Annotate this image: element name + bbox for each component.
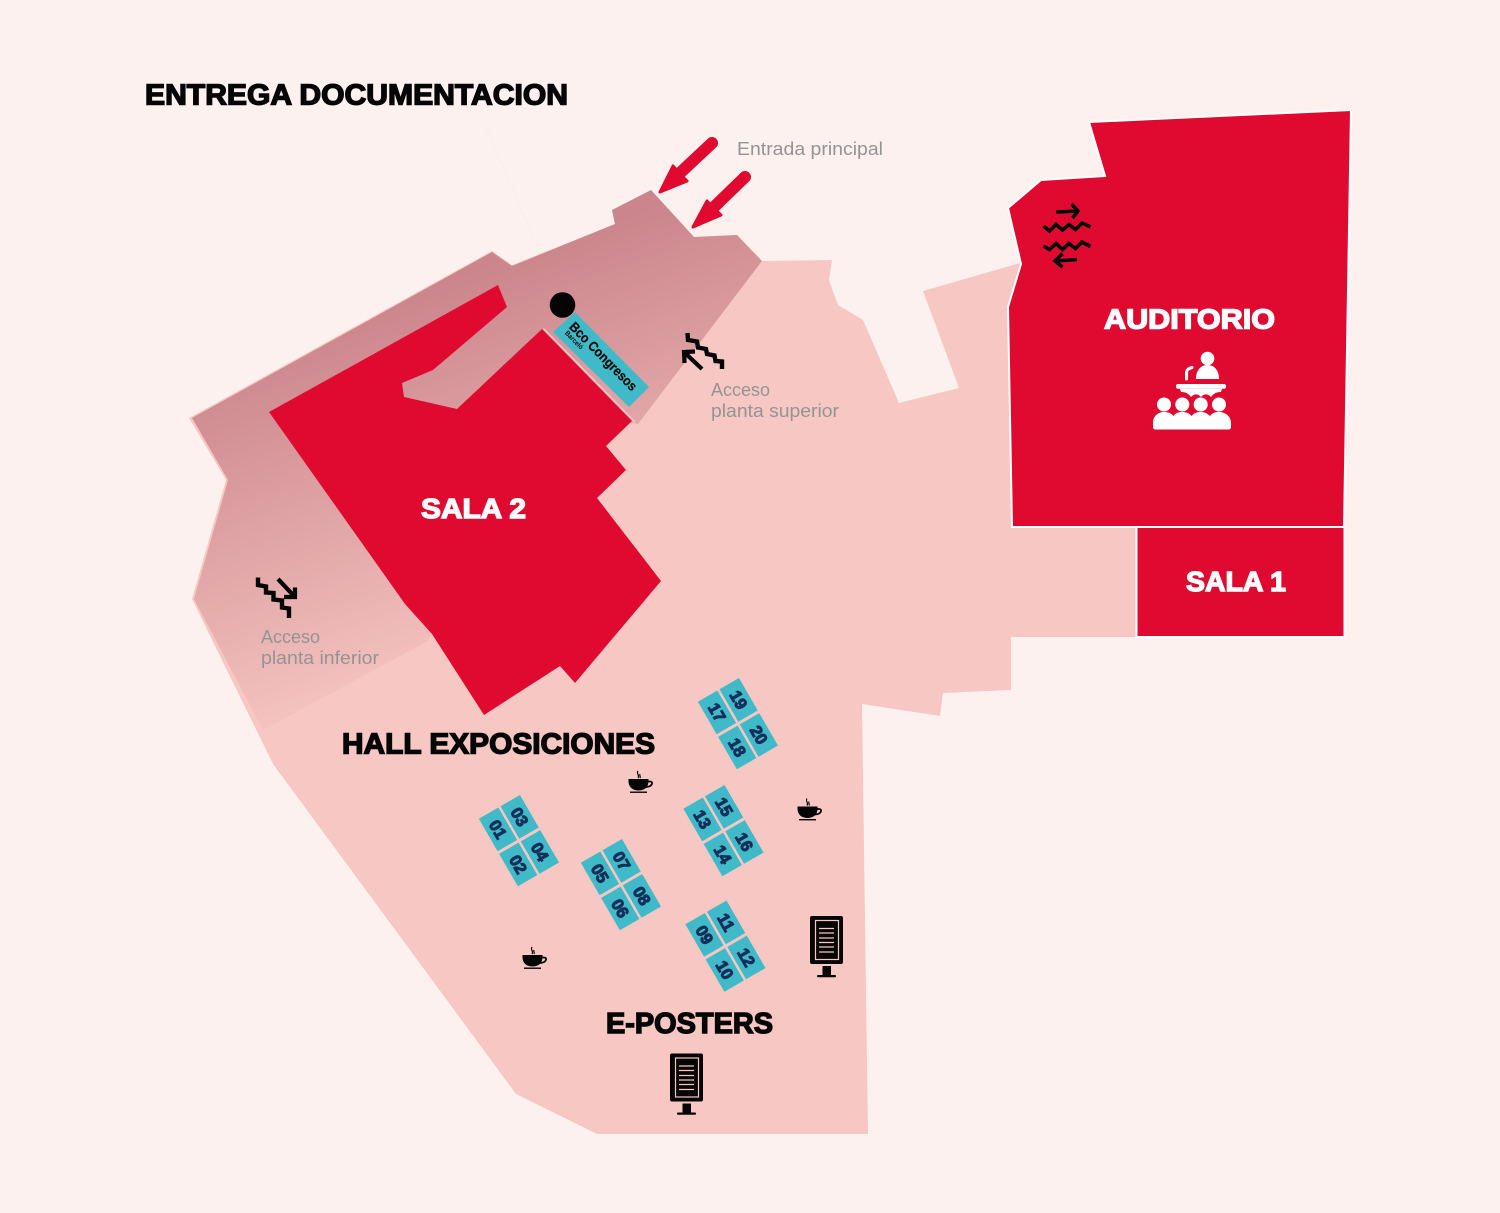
stands 17 to 20: 18 — [724, 735, 749, 760]
stands 13 to 16: 15 — [711, 795, 736, 820]
faint construction line — [485, 125, 541, 255]
stands 13 to 16: 13 — [689, 807, 714, 832]
icon: entrance arrow one — [660, 143, 712, 192]
stands 05 to 08: 06 — [607, 896, 632, 921]
stands 09 to 12: 12 — [733, 945, 758, 970]
heading: hall exposiciones: HALL EXPOSICIONES — [342, 728, 655, 760]
label: sala 2: SALA 2 — [421, 493, 526, 524]
stands 01 to 04: 02 — [505, 852, 530, 877]
icon: coffee one — [628, 771, 652, 793]
icon: entrance arrow two — [693, 177, 745, 227]
pale edge of sala 2 — [544, 328, 635, 422]
label: sala 1: SALA 1 — [1186, 566, 1286, 597]
icon: coffee three — [522, 947, 546, 969]
stands 01 to 04: 03 — [507, 805, 531, 830]
icon: wavy passage arrows — [1044, 204, 1090, 267]
stands 01 to 04 — [479, 795, 559, 886]
label: acceso planta inferior: planta inferior — [261, 648, 379, 668]
panel: sala 2 — [269, 285, 661, 715]
label: acceso planta superior — [711, 380, 839, 421]
stands 05 to 08 — [581, 839, 661, 930]
label: entrada principal: Entrada principal — [737, 139, 883, 159]
heading: e-posters: E-POSTERS — [606, 1008, 773, 1040]
banner: bco congresos — [553, 312, 649, 407]
stands 09 to 12: 09 — [691, 923, 716, 948]
stands 05 to 08: 08 — [629, 884, 654, 909]
icon: e-poster screen one — [810, 916, 843, 977]
label: acceso planta superior: planta superior — [711, 401, 839, 421]
panel: auditorio — [1008, 110, 1351, 527]
label: acceso planta inferior: Acceso — [261, 627, 320, 647]
label: acceso planta inferior — [261, 627, 379, 668]
stands 01 to 04: 04 — [527, 840, 552, 865]
icon: speaker and audience — [1153, 352, 1231, 430]
stands 17 to 20 — [698, 678, 778, 769]
label: auditorio: AUDITORIO — [1104, 304, 1275, 334]
title: ENTREGA DOCUMENTACION — [145, 80, 568, 112]
stands 13 to 16: 14 — [710, 842, 735, 868]
stands 09 to 12: 10 — [712, 958, 736, 983]
icon: e-poster screen two — [670, 1054, 703, 1115]
stands 05 to 08: 05 — [587, 861, 612, 886]
stands 01 to 04: 01 — [485, 817, 510, 842]
stands 17 to 20: 19 — [726, 688, 750, 713]
label: acceso planta superior: Acceso — [711, 380, 770, 400]
stands 17 to 20: 17 — [704, 700, 729, 725]
stands 13 to 16 — [683, 785, 764, 876]
panel: sala 1 — [1136, 527, 1344, 637]
icon: coffee two — [798, 798, 821, 820]
stands 13 to 16: 16 — [731, 830, 756, 855]
marker: black dot — [550, 292, 575, 318]
stands 17 to 20: 20 — [746, 723, 771, 748]
icon: stairs up — [684, 333, 722, 369]
stands 05 to 08: 07 — [609, 849, 633, 874]
icon: stairs down — [258, 578, 295, 618]
stands 09 to 12 — [685, 900, 766, 992]
floor plan: hall area — [189, 190, 1136, 1134]
banner logo: Barceló — [563, 330, 584, 351]
banner text: Bco Congresos — [566, 319, 640, 394]
floor plan: entrance foyer with gradient — [192, 190, 762, 730]
stands 09 to 12: 11 — [713, 911, 738, 935]
